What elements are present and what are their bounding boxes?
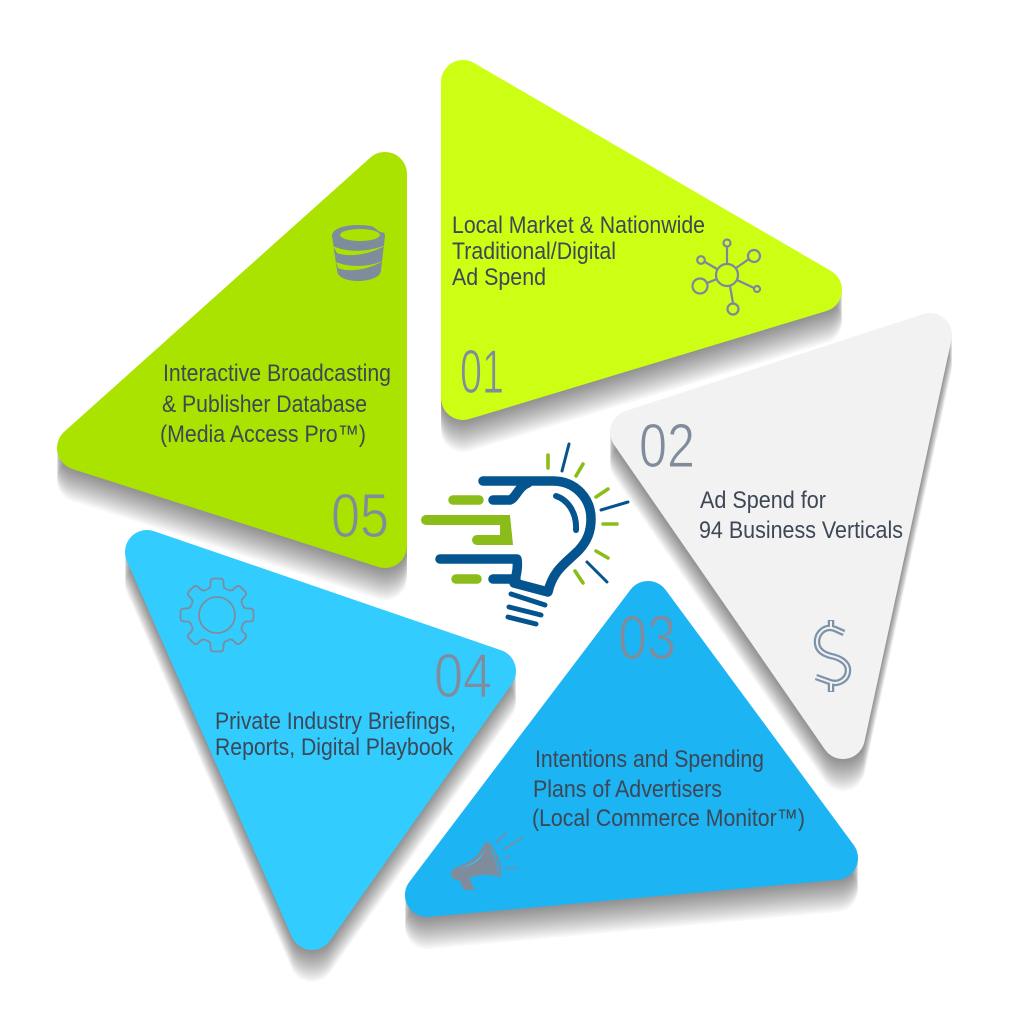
text: interactive broadcasting: Interactive Broadcasting (163, 360, 391, 387)
icon: database (332, 225, 386, 281)
text: local market: Ad Spend (452, 264, 546, 291)
text: industry briefings: Private Industry Briefings, (215, 708, 456, 735)
text: local market (452, 212, 705, 291)
panel: 05 publisher database (79, 174, 391, 551)
text: interactive broadcasting: (Media Access Pro™) (160, 421, 366, 448)
green connected bars (421, 515, 513, 545)
text: business verticals: 94 Business Verticals (699, 517, 903, 544)
number 03: 03 (618, 604, 676, 673)
text: interactive broadcasting: & Publisher Database (162, 391, 367, 418)
panel: 04 industry briefings (147, 552, 494, 928)
text: local market: Local Market & Nationwide (452, 212, 705, 239)
text: industry briefings (215, 708, 456, 761)
icon: megaphone (451, 833, 523, 890)
panel: 03 advertisers (427, 603, 836, 895)
bulb inner bars (493, 483, 528, 579)
icon: dollar (816, 620, 848, 692)
panel: 01 local market (452, 82, 820, 407)
text: advertisers: (Local Commerce Monitor™) (532, 805, 805, 832)
icon: central light bulb (421, 444, 628, 624)
green speed bars (453, 500, 479, 579)
text: advertisers (532, 746, 805, 832)
bulb base (508, 594, 545, 624)
number 02: 02 (639, 412, 695, 481)
icon: gear (180, 578, 254, 652)
text: industry briefings: Reports, Digital Playbook (215, 734, 454, 761)
text: local market: Traditional/Digital (452, 238, 616, 265)
text: advertisers: Plans of Advertisers (533, 776, 722, 803)
text: interactive broadcasting (160, 360, 391, 448)
green rays (548, 455, 617, 583)
text: advertisers: Intentions and Spending (535, 746, 764, 773)
bulb outline (440, 481, 591, 592)
number 05: 05 (331, 482, 389, 551)
blue rays (562, 444, 628, 582)
icon: network (692, 240, 760, 314)
panel: 02 business verticals (632, 335, 930, 737)
number 04: 04 (434, 642, 492, 711)
text: business verticals (699, 487, 903, 544)
number 01: 01 (460, 338, 504, 407)
text: business verticals: Ad Spend for (700, 487, 826, 514)
panel shadows (79, 84, 930, 960)
bulb highlight (556, 496, 576, 530)
